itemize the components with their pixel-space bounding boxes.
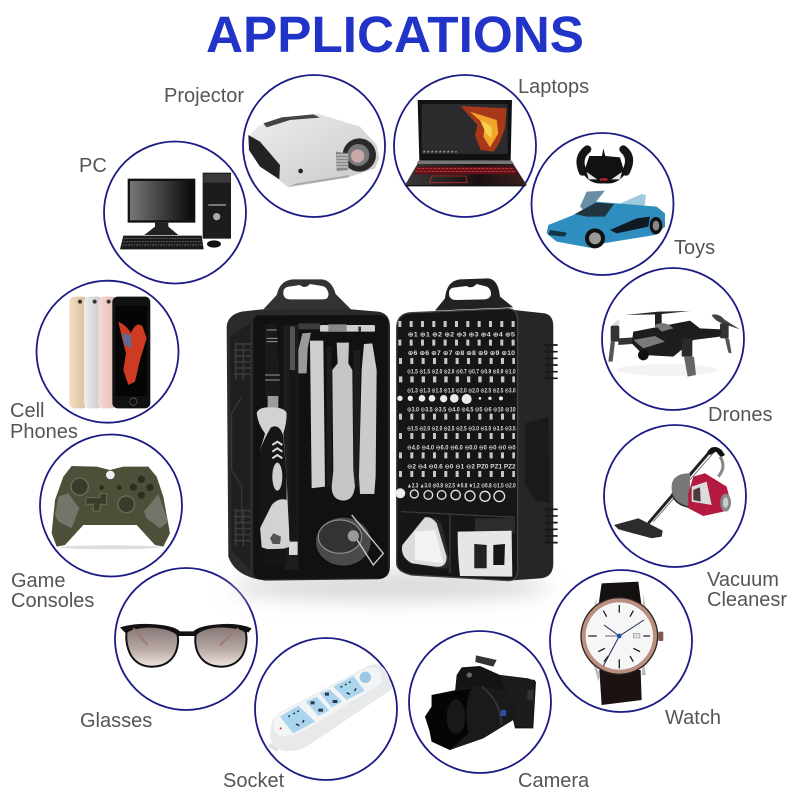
- title: APPLICATIONS: [206, 6, 584, 63]
- label: Cell: [10, 400, 44, 422]
- label: Projector: [164, 85, 244, 107]
- right handle: [435, 278, 513, 311]
- icon: drone: [608, 311, 740, 377]
- panel: cell phones: [10, 281, 178, 443]
- icon: power strip: [268, 664, 393, 752]
- circle: [550, 570, 692, 712]
- circle: [115, 568, 257, 710]
- right case: [396, 278, 558, 581]
- panel: laptops: [394, 75, 589, 217]
- label line 2: Cleanesr: [707, 589, 787, 611]
- icon: phones: [69, 297, 150, 408]
- icon: projector: [248, 113, 379, 187]
- bit size labels: ⊕6 ⊕6 ⊕7 ⊕7 ⊕8 ⊕8 ⊕9 ⊕9 ⊕10: [408, 350, 515, 357]
- left clips: [234, 343, 251, 547]
- bit size labels: ⊕1 ⊕1 ⊕2 ⊕2 ⊕3 ⊕3 ⊕4 ⊕4 ⊕5: [408, 331, 516, 338]
- compartment shading: [283, 325, 360, 570]
- icon: sunglasses: [120, 624, 252, 667]
- panel: toys: [532, 133, 715, 275]
- label: Socket: [223, 770, 285, 792]
- socket bits row: [396, 489, 505, 502]
- label: Glasses: [80, 710, 152, 732]
- label: Camera: [518, 770, 590, 792]
- compartment divider: [401, 512, 515, 573]
- circle: [602, 268, 744, 410]
- floor shadow: [230, 573, 550, 600]
- circle: [255, 638, 397, 780]
- icon: game controller: [52, 466, 170, 549]
- screwdriver: [257, 324, 290, 567]
- icon: vacuum cleaner: [614, 447, 731, 538]
- left handle: [263, 279, 352, 310]
- panel: game consoles: [11, 434, 182, 612]
- bit size labels: ⊙3.0 ⊙3.5 ⊙3.5 ⊙4.0 ⊙4.5 ⊙5 ⊙6 ⊙10 ⊙10: [407, 406, 516, 413]
- icon: desktop computer: [120, 173, 231, 249]
- suction cup: [316, 515, 383, 566]
- panel: projector: [164, 75, 385, 217]
- hex bits: [397, 394, 503, 404]
- label: PC: [79, 155, 107, 177]
- label: Vacuum: [707, 569, 779, 591]
- panel: vacuum cleaners: [604, 425, 787, 611]
- white tool holder: [458, 531, 512, 577]
- bit size labels: ▲2.3 ▲3.0 ⊙0.8 ⊙2.5 ★0.8 ★1.2 ⊙0.8 ⊙1.5 ⊙2.0: [407, 482, 516, 489]
- pry tool 1: [310, 341, 325, 488]
- bit size labels: ⊙1.5 ⊙1.5 ⊙2.0 ⊙2.0 ⊙0.7 ⊙0.7 ⊙0.9 ⊙0.9 ⊙1.0: [407, 369, 516, 376]
- left shell: [227, 309, 390, 581]
- panel: socket: [223, 638, 397, 792]
- bit size labels: ⊖1.5 ⊖2.0 ⊖2.0 ⊖2.5 ⊖2.5 ⊖3.0 ⊖3.0 ⊖3.5 ⊖3.5: [407, 425, 516, 432]
- circle: [40, 434, 182, 576]
- icon: toy car and remote: [547, 148, 665, 248]
- circle: [243, 75, 385, 217]
- icon: camera: [425, 655, 536, 750]
- panel: camera: [409, 631, 590, 792]
- circle: [394, 75, 536, 217]
- bit size labels: ⊖4.0 ⊖4.0 ⊖6.0 ⊖6.0 ⊖0.0 ⊖0 ⊖0 ⊖0 ⊖0: [407, 444, 516, 451]
- icon: laptop: [404, 100, 527, 186]
- dark block behind holder: [475, 518, 515, 533]
- pry tool 2: [332, 343, 355, 501]
- circle: [604, 425, 746, 567]
- circle: [36, 281, 178, 423]
- right shell side: [508, 309, 553, 581]
- label line 2: Consoles: [11, 590, 94, 612]
- circle: [532, 133, 674, 275]
- pry tool 3: [359, 343, 377, 494]
- label: Game: [11, 570, 65, 592]
- label: Watch: [665, 707, 721, 729]
- bit holder: [298, 323, 375, 332]
- panel: drones: [602, 268, 772, 426]
- circle: [409, 631, 551, 773]
- opening picks: [402, 517, 450, 569]
- icon: wristwatch: [580, 582, 663, 705]
- panel: watch: [550, 570, 721, 729]
- right clips: [543, 343, 558, 545]
- label: Toys: [674, 237, 715, 259]
- circle: [104, 142, 246, 284]
- right tray: [397, 309, 518, 581]
- left case: [227, 279, 390, 581]
- label: Laptops: [518, 76, 589, 98]
- bit size labels: [407, 331, 516, 489]
- panel: PC: [79, 142, 246, 284]
- product: screwdriver kit: [227, 278, 558, 600]
- bit size labels: ⊖2 ⊖4 ⊖0.6 ⊖0 ⊖1 ⊖2 PZ0 PZ1 PZ2: [407, 463, 516, 470]
- label: Drones: [708, 404, 772, 426]
- bit size labels: ⊙1.3 ⊙1.3 ⊙1.5 ⊙1.5 ⊙2.0 ⊙2.0 ⊙2.5 ⊙2.5 ⊙3.0: [407, 387, 516, 394]
- bit rows: [398, 324, 515, 474]
- label line 2: Phones: [10, 421, 78, 443]
- panel: glasses: [80, 568, 257, 732]
- extension bar: [289, 327, 311, 555]
